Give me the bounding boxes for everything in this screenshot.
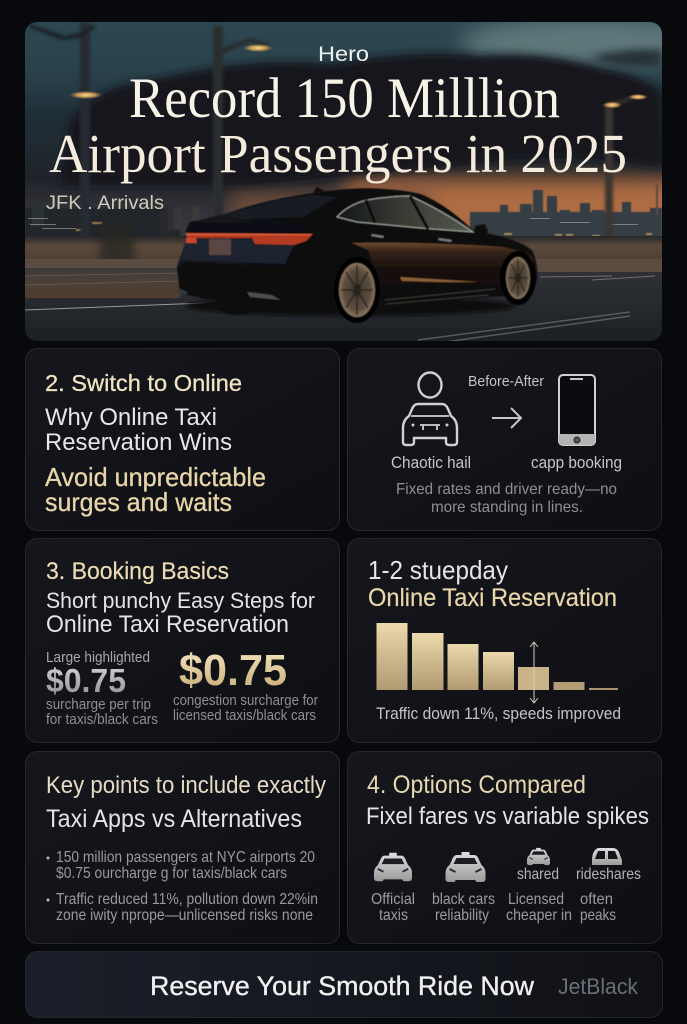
black sedan — [177, 187, 537, 323]
hero title — [49, 67, 627, 184]
subheading — [45, 404, 232, 456]
gold benefit statement: Avoid unpredictable — [45, 462, 266, 492]
option labels: taxis — [379, 907, 408, 924]
description: Fixed rates and driver ready—no — [396, 481, 617, 498]
panel: key points — [26, 752, 340, 944]
option labels: reliability — [435, 907, 489, 924]
bullet list — [46, 849, 318, 924]
subheading: Online Taxi Reservation — [46, 611, 289, 638]
large stat — [173, 646, 318, 724]
panel: switch to online — [26, 348, 340, 530]
subheading — [46, 588, 315, 638]
description — [396, 481, 617, 516]
section heading: 2. Switch to Online — [45, 370, 242, 396]
icon: rideshare van — [592, 848, 622, 865]
small stat: for taxis/black cars — [46, 711, 158, 728]
subheading: Fixel fares vs variable spikes — [366, 803, 649, 830]
section heading: 4. Options Compared — [367, 771, 586, 799]
option labels: rideshares — [576, 866, 641, 883]
description: more standing in lines. — [431, 499, 583, 516]
call to action text: Reserve Your Smooth Ride Now — [150, 971, 534, 1001]
icon: black car — [446, 852, 486, 882]
caption: chaotic hail: Chaotic hail — [391, 454, 471, 472]
small stat: surcharge per trip — [46, 696, 151, 713]
arrow: traffic change — [530, 642, 538, 703]
before-after label: Before-After — [468, 373, 544, 390]
heading: 1-2 stuepday — [368, 555, 508, 585]
road and barrier — [25, 222, 662, 342]
panel: traffic chart — [348, 538, 662, 742]
panel: options compared — [348, 752, 662, 944]
subheading: Taxi Apps vs Alternatives — [46, 805, 302, 833]
panel: before-after — [348, 348, 662, 530]
street lamps — [30, 22, 648, 244]
hero photo: dusk sky and skyline — [25, 22, 662, 236]
bullet list: zone iwity nprope—unlicensed risks none — [56, 907, 313, 924]
hero panel — [25, 18, 687, 342]
icon: official taxi — [374, 853, 412, 881]
option labels: Licensed — [508, 891, 564, 908]
bullet list: 150 million passengers at NYC airports 20 — [56, 849, 315, 866]
small stat: $0.75 — [46, 662, 126, 699]
brand name: JetBlack — [558, 974, 639, 999]
bar chart — [376, 623, 618, 690]
icon: person in taxi — [403, 372, 457, 445]
chart caption: Traffic down 11%, speeds improved — [376, 704, 621, 723]
hero title: Record 150 Milllion — [129, 67, 560, 130]
hero label: Hero — [318, 43, 369, 66]
icon: shared car — [527, 848, 550, 865]
option labels: black cars — [432, 891, 495, 908]
option labels: cheaper in — [506, 907, 572, 924]
small stat — [46, 649, 158, 728]
caption: app booking: capp booking — [531, 454, 622, 472]
icon: phone — [559, 375, 595, 445]
bullet list: $0.75 ourcharge g for taxis/black cars — [56, 865, 287, 882]
small stat: Large highlighted — [46, 649, 150, 666]
panel: booking basics — [26, 538, 340, 742]
gold benefit statement: surges and waits — [45, 487, 232, 517]
large stat: $0.75 — [179, 646, 287, 695]
option labels: shared — [517, 866, 559, 883]
heading: Key points to include exactly — [46, 772, 326, 799]
bullet list: Traffic reduced 11%, pollution down 22%in — [56, 891, 318, 908]
call to action bar — [26, 952, 662, 1018]
option labels: Official — [371, 891, 415, 908]
option labels: peaks — [580, 907, 616, 924]
location label: JFK . Arrivals — [46, 193, 164, 214]
subheading: Why Online Taxi — [45, 404, 217, 431]
section heading: 3. Booking Basics — [46, 558, 229, 585]
hero title: Airport Passengers in 2025 — [49, 123, 627, 184]
arrow — [492, 408, 521, 428]
large stat: congestion surcharge for — [173, 692, 318, 709]
subheading: Short punchy Easy Steps for — [46, 588, 315, 613]
option labels — [371, 866, 641, 924]
option labels: often — [580, 891, 613, 908]
large stat: licensed taxis/black cars — [173, 707, 316, 724]
subheading: Reservation Wins — [45, 429, 232, 456]
gold heading: Online Taxi Reservation — [368, 584, 617, 612]
gold benefit statement — [45, 462, 266, 517]
